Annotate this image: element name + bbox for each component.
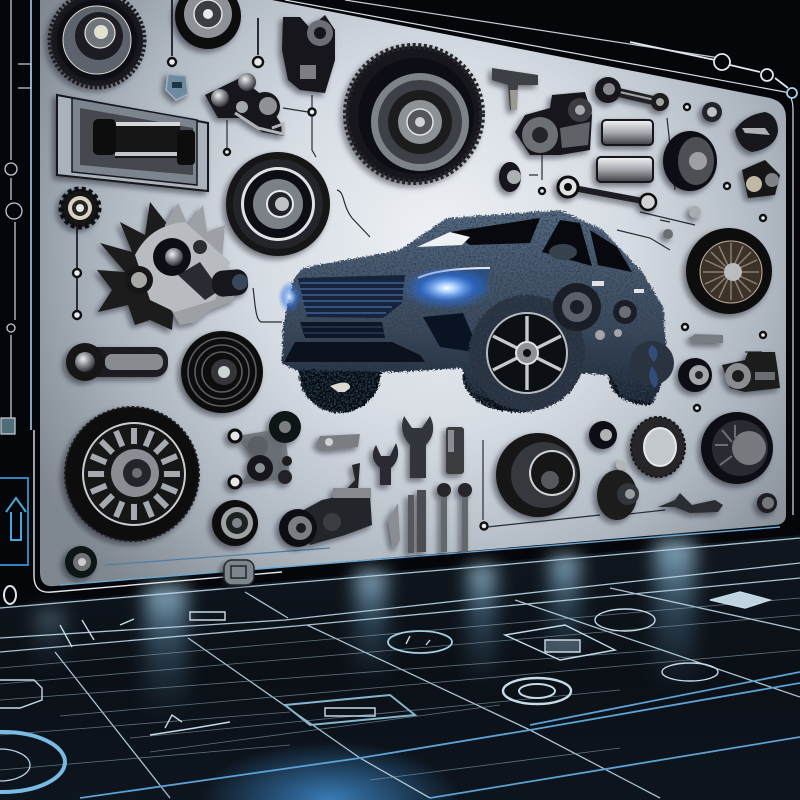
parts on panel: [51, 0, 780, 585]
part: camera-like assembly: [279, 463, 372, 547]
icon: tool row: [388, 483, 472, 553]
icon: wrench large: [402, 416, 433, 478]
wheel: tiny right: [757, 493, 777, 513]
car headlight glow: [401, 266, 493, 310]
panel: [34, 0, 793, 592]
wheel: bottom left alloy: [65, 407, 199, 541]
small circuit nodes: [73, 57, 766, 530]
wheel: small bottom: [212, 500, 258, 546]
car headlight: [417, 268, 490, 295]
wheel: ridged disc: [181, 331, 263, 413]
wheel: top small: [175, 0, 241, 49]
part: bracket top centre: [282, 15, 335, 93]
icon: bottom badge: [224, 560, 254, 585]
part: lever: [66, 343, 168, 381]
part: cluster right: [742, 160, 780, 198]
floor gauge: [0, 732, 65, 792]
part: rod top right: [595, 77, 669, 111]
car intake: [423, 313, 480, 353]
floor light reflections: [35, 540, 695, 715]
part: threaded cylinder: [446, 427, 464, 474]
part: small pin: [688, 334, 723, 343]
car rear wheel: [630, 341, 674, 388]
wheel: right cap: [701, 412, 773, 484]
car main wheel: [469, 295, 585, 411]
part: top T-bracket: [492, 68, 538, 110]
left node diamond: [4, 586, 16, 604]
car body: [282, 210, 668, 408]
floor bottom glow: [200, 740, 460, 800]
car grille: [284, 275, 425, 362]
wheel: small right: [678, 358, 712, 392]
floor blue lines: [80, 672, 800, 798]
spiked gear assembly: [97, 202, 249, 330]
ring: brake disc: [631, 417, 685, 477]
left dark side circuit strip: [1, 0, 31, 434]
part: linkage: [205, 73, 284, 136]
top-right nodes: [630, 42, 797, 98]
wheel: small centre top: [499, 162, 521, 192]
wheel: upper right: [663, 131, 717, 191]
car: [278, 210, 674, 413]
circuit lines on panel: [77, 0, 762, 565]
part: cylinders: [597, 120, 653, 182]
part: framed rectangle: [57, 95, 208, 191]
wheel: right turbine: [686, 228, 772, 314]
wheel: tiny: [589, 421, 617, 449]
floor symbols: [0, 592, 770, 735]
icon: small tag: [166, 74, 188, 100]
car white hub glint: [330, 382, 350, 392]
wheel: small top right: [702, 102, 722, 122]
part: long rod: [558, 177, 656, 210]
car side gears: [553, 281, 644, 340]
car black wheels: [299, 331, 660, 413]
icon: small spanner: [663, 206, 701, 239]
icon: wrench small: [373, 443, 398, 485]
part: bent arm: [658, 493, 723, 513]
left glowing arrow icon: [0, 478, 28, 565]
floor: [0, 535, 800, 800]
car windows: [417, 218, 632, 272]
car grille edge glow: [278, 281, 302, 313]
small gear: [61, 189, 99, 227]
part: right engine block: [722, 352, 780, 392]
wheel: centre-left: [226, 152, 330, 256]
floor grid major lines: [0, 538, 800, 798]
wheel: tiny bottom left: [65, 546, 97, 578]
large tyre: [346, 46, 482, 182]
wheel: dark hub: [496, 433, 580, 517]
part: small gear cluster: [229, 411, 301, 488]
part: key: [316, 434, 360, 450]
wheel: top left: [51, 0, 143, 86]
part: pear hub: [597, 460, 639, 520]
part: dome: [735, 112, 778, 152]
part: top assembly: [515, 92, 592, 155]
floor thin lines: [0, 598, 800, 780]
